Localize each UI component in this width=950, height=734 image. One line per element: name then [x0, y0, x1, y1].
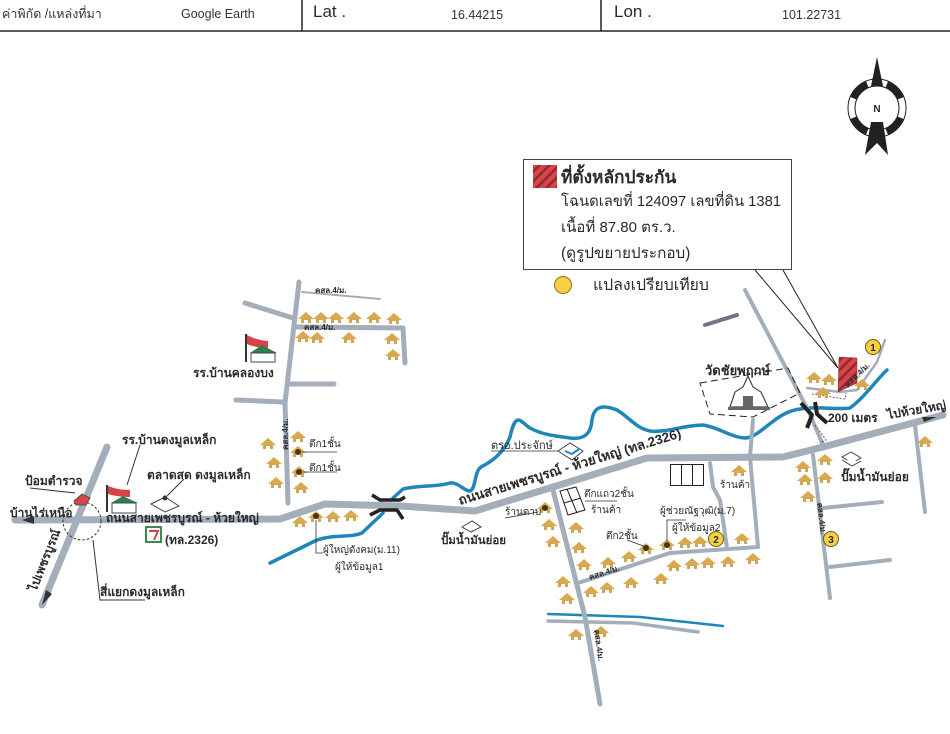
text: road and place labels: ไปเพชรบูรณ์ [24, 527, 64, 595]
numbered comparison markers: 1 [870, 343, 876, 354]
text: road and place labels [10, 286, 947, 662]
temple boundary and icon: วัดชัยพฤกษ์ [705, 363, 770, 378]
numbered comparison markers: 3 [828, 535, 834, 546]
text: road and place labels: ตรอ.ประจักษ์ [491, 439, 553, 452]
text: road and place labels: สี่แยกดงมูลเหล็ก [100, 583, 185, 600]
header table: coordinates: 16.44215 [451, 8, 503, 22]
text: road and place labels: ผู้ให้ข้อมูล1 [335, 561, 384, 573]
icon: school Ban Khlong Bong: รร.บ้านคลองบง [193, 366, 274, 380]
text: road and place labels: บ้านไร่เหนือ [10, 505, 72, 520]
header table: coordinates: Lat . [313, 2, 346, 21]
text: road and place labels: คสล.4/ม. [815, 502, 828, 535]
text: road and place labels: คสล.4/ม. [843, 361, 872, 389]
text: road and place labels: ร้านค้า [591, 504, 621, 516]
legend box [524, 160, 792, 294]
text: road and place labels: คสล.4/ม. [592, 629, 605, 662]
text: road and place labels: ผู้ใหญ่ดังคม(ม.11) [323, 544, 400, 556]
text: road and place labels: คสล.4/ม. [304, 323, 336, 332]
text: road and place labels: ตึก1ชั้น [309, 436, 341, 450]
main highway 2326 [15, 415, 943, 520]
bridge right [801, 402, 827, 428]
rivers [270, 370, 887, 626]
icon: school Ban Khlong Bong [193, 334, 277, 380]
text: road and place labels: ถนนสายเพชรบูรณ์ - ห้วยใหญ่ [106, 510, 259, 526]
icon: fresh market: ตลาดสด ดงมูลเหล็ก [147, 467, 251, 483]
compass north arrow [848, 57, 906, 155]
icon: fresh market [147, 467, 251, 512]
houses [260, 312, 933, 640]
icons: small petrol pumps and shop [462, 443, 861, 532]
text: road and place labels: ผู้ให้ข้อมูล2 [672, 522, 721, 534]
numbered comparison markers [708, 340, 880, 546]
compass north arrow: N [873, 104, 881, 115]
icon: school Ban Dong Mun Lek: รร.บ้านดงมูลเหล็ก [122, 432, 216, 448]
text: road and place labels: ตึก2ชั้น [606, 528, 638, 542]
text: road and place labels: ตึก1ชั้น [309, 460, 341, 474]
text: road and place labels: ถนนสายเพชรบูรณ์ - ห้วยใหญ่ (ทล.2326) [456, 425, 683, 509]
text: road and place labels: ตึกแถว2ชั้น [584, 486, 634, 500]
numbered comparison markers: 2 [713, 535, 719, 546]
legend box: เนื้อที่ 87.80 ตร.ว. [561, 216, 676, 236]
legend box: ที่ตั้งหลักประกัน [561, 164, 676, 187]
bridge left [370, 495, 405, 519]
header table: coordinates: ค่าพิกัด /แหล่งที่มา [2, 5, 102, 21]
dotted access path to parcel [812, 393, 846, 443]
text: road and place labels: 200 เมตร [828, 411, 878, 425]
text: road and place labels: ปั๊มน้ำมันย่อย [841, 467, 909, 484]
legend box: โฉนดเลขที่ 124097 เลขที่ดิน 1381 [561, 190, 781, 210]
intersection circle [63, 502, 145, 600]
shop row buildings [560, 464, 704, 515]
text: road and place labels: คสล.4/ม. [315, 286, 347, 295]
icon: school Ban Dong Mun Lek [107, 432, 216, 513]
text: road and place labels: ปั๊มน้ำมันย่อย [441, 531, 506, 547]
dark building markers [295, 449, 670, 551]
text: road and place labels: ผู้ช่วยณัฐวุฒิ(ม.7) [660, 505, 735, 517]
legend box: แปลงเปรียบเทียบ [593, 276, 709, 294]
text: road and place labels: ร้านค้า [720, 479, 750, 491]
header table: coordinates [0, 0, 950, 31]
text: road and place labels: คสล.4/ม. [281, 418, 290, 450]
header table: coordinates: Google Earth [181, 7, 255, 21]
text: road and place labels: คสล.4/ม. [588, 564, 621, 582]
text: road and place labels: (ทล.2326) [165, 533, 218, 547]
arrowheads on roads [22, 417, 937, 605]
callout leader lines [302, 451, 686, 553]
temple boundary and icon [700, 363, 800, 417]
red parcel [838, 357, 857, 392]
icon: police box [25, 474, 90, 505]
text: road and place labels: ไปห้วยใหญ่ [884, 397, 947, 422]
text: road and place labels: ร้านดาบ [505, 506, 541, 518]
leader lines from legend to parcel [755, 270, 838, 368]
icon: 7-Eleven [146, 527, 161, 542]
legend box: (ดูรูปขยายประกอบ) [561, 245, 690, 262]
icon: police box: ป้อมตำรวจ [25, 474, 82, 488]
header table: coordinates: Lon . [614, 2, 652, 21]
header table: coordinates: 101.22731 [782, 8, 841, 22]
road network [15, 282, 943, 704]
